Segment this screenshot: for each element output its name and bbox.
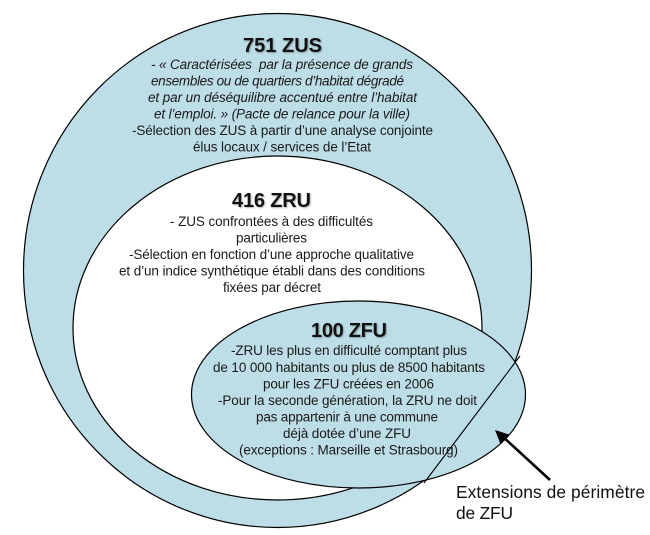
- ZRU description: particulières: [236, 230, 307, 246]
- ZUS outer ellipse: [24, 14, 532, 528]
- ZRU description: -Sélection en fonction d’une approche qualitative: [129, 247, 414, 262]
- ZFU description: déjà dotée d’une ZFU: [283, 426, 411, 441]
- ZRU description: [119, 214, 425, 295]
- ZFU description: -Pour la seconde génération, la ZRU ne doit: [218, 393, 477, 408]
- ZFU description: pas appartenir à une commune: [256, 410, 438, 424]
- extension label: Extensions de périmètre: [456, 482, 645, 502]
- ZRU middle ellipse: [73, 156, 482, 500]
- ZFU description: de 10 000 habitants ou plus de 8500 habitants: [213, 360, 485, 375]
- ZUS description: ensembles ou de quartiers d’habitat dégradé: [151, 74, 404, 88]
- ZFU description: [213, 343, 485, 458]
- ZUS description: et l’emploi. » (Pacte de relance pour la ville): [154, 106, 410, 122]
- ZFU perimeter boundary line: [424, 356, 520, 483]
- ZFU inner ellipse: [192, 301, 526, 488]
- ZRU heading: 416 ZRU: [232, 190, 311, 212]
- extension label: [456, 482, 645, 523]
- arrow to perimeter extension: [495, 430, 550, 480]
- ZUS heading: 751 ZUS: [243, 35, 322, 57]
- ZUS description: et par un déséquilibre accentué entre l’habitat: [148, 90, 418, 105]
- ZUS description: -Sélection des ZUS à partir d’une analyse conjointe: [132, 123, 433, 138]
- ZFU text block: [213, 320, 485, 458]
- ZUS description: - « Caractérisées par la présence de grands: [151, 57, 413, 72]
- extension label: de ZFU: [456, 503, 513, 523]
- ZUS description: élus locaux / services de l’Etat: [193, 140, 371, 154]
- ZFU description: pour les ZFU créées en 2006: [263, 376, 434, 392]
- ZFU description: (exceptions : Marseille et Strasbourg): [239, 442, 458, 458]
- ZUS text block: [132, 35, 433, 154]
- ZRU description: - ZUS confrontées à des difficultés: [170, 214, 373, 229]
- ZUS description: [132, 57, 433, 154]
- ZRU description: et d’un indice synthétique établi dans des conditions: [119, 264, 425, 278]
- ZRU text block: [119, 190, 425, 295]
- ZRU description: fixées par décret: [223, 280, 321, 295]
- ZFU description: -ZRU les plus en difficulté comptant plus: [231, 343, 467, 358]
- ZFU heading: 100 ZFU: [311, 320, 387, 342]
